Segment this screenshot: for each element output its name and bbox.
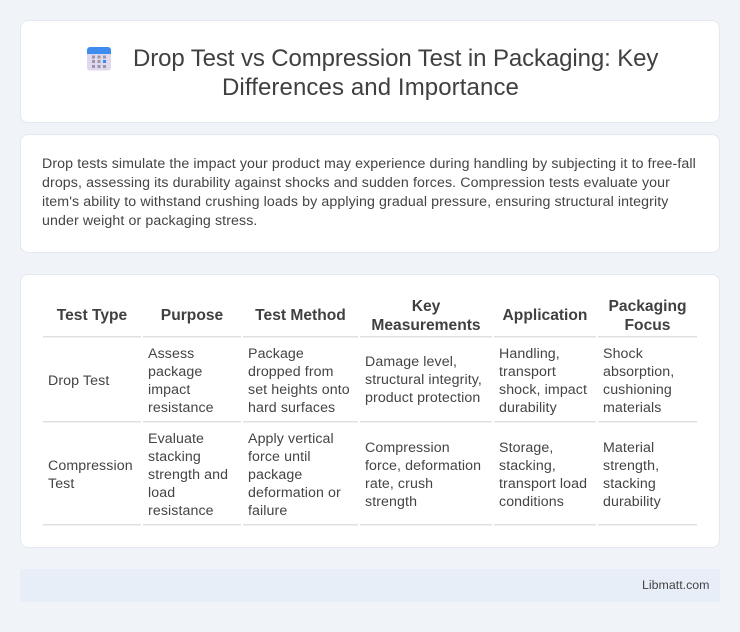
row 2: Compression Test: Compression (48, 458, 133, 474)
row 1: focus: materials (603, 400, 661, 416)
row 2: measurements (365, 440, 481, 510)
title (133, 45, 658, 101)
panel: comparison table card (20, 274, 720, 548)
row 1: measurements: product protection (365, 390, 480, 406)
row 1: purpose: Assess (148, 346, 194, 362)
row 1: method: hard surfaces (248, 400, 335, 416)
header: Test Method: Test Method (255, 307, 346, 324)
row 1: purpose: resistance (148, 400, 214, 416)
header: Key Measurements: Measurements (371, 317, 481, 334)
header: Key Measurements: Key (412, 298, 440, 315)
row 1: application: Handling, (499, 346, 560, 362)
row 2: application: conditions (499, 494, 564, 510)
row 1: purpose: impact (148, 382, 190, 398)
row 1: focus: Shock (603, 346, 643, 362)
row 1: measurements: structural integrity, (365, 372, 482, 388)
title: Drop Test vs Compression Test in Packaging: Key (133, 45, 658, 72)
intro paragraph: Drop tests simulate the impact your product may experience during handling by subjecting it to free-fall (42, 156, 696, 172)
row 2: purpose: load (148, 485, 175, 501)
row 1: method: dropped from (248, 364, 334, 380)
row 2: measurements: rate, crush (365, 476, 433, 492)
header: Packaging Focus: Packaging (608, 298, 686, 315)
row 2: application: stacking, (499, 458, 556, 474)
row 1: method (248, 346, 350, 416)
panel: header card (20, 20, 720, 123)
intro paragraph: drops, assessing its durability against shocks and sudden forces. Compression tests evaluate your (42, 175, 670, 191)
panel: intro paragraph card (20, 134, 720, 253)
row 2: measurements: strength (365, 494, 417, 510)
row 2: Compression Test (48, 458, 133, 492)
row 2: method: Apply vertical (248, 431, 334, 447)
comparison table (43, 298, 697, 526)
row 1: application: transport (499, 364, 556, 380)
row 1: application: shock, impact (499, 382, 587, 398)
row 1: measurements (365, 354, 482, 406)
intro paragraph (42, 156, 696, 229)
row 2: purpose: strength and (148, 467, 228, 483)
row 2: focus: stacking (603, 476, 656, 492)
header: Key Measurements (371, 298, 481, 334)
row 2: Compression Test: Test (48, 476, 74, 492)
row 2: focus: strength, (603, 458, 659, 474)
row 1: Drop Test: Drop Test (48, 373, 109, 389)
row 2: method: force until (248, 449, 311, 465)
row 1: focus: cushioning (603, 382, 672, 398)
icon: calendar (87, 47, 111, 70)
header: Purpose: Purpose (161, 307, 223, 324)
header: Application: Application (503, 307, 587, 324)
row 1: application: durability (499, 400, 557, 416)
intro paragraph: item's ability to withstand crushing loads by applying gradual pressure, ensuring structural integrity (42, 194, 668, 210)
row 1: measurements: Damage level, (365, 354, 457, 370)
row 2: application (499, 440, 587, 510)
row 2: method: deformation or (248, 485, 341, 501)
row 2: application: transport load (499, 476, 587, 492)
row 2: purpose: resistance (148, 503, 214, 519)
row 1: focus (603, 346, 674, 416)
row 2: purpose: stacking (148, 449, 201, 465)
row 1: application (499, 346, 587, 416)
title: Differences and Importance (222, 74, 519, 101)
row 2: measurements: Compression (365, 440, 450, 456)
intro paragraph: under weight or packaging stress. (42, 213, 257, 229)
footer bar (20, 569, 720, 602)
row 2: purpose: Evaluate (148, 431, 204, 447)
row 2: measurements: force, deformation (365, 458, 481, 474)
header: Test Type: Test Type (57, 307, 127, 324)
row 2: method (248, 431, 341, 519)
header: Packaging Focus (608, 298, 686, 334)
row 1: method: set heights onto (248, 382, 350, 398)
row 2: purpose (148, 431, 228, 519)
row 2: application: Storage, (499, 440, 553, 456)
row 1: purpose: package (148, 364, 202, 380)
row 1: purpose (148, 346, 214, 416)
row 1: focus: absorption, (603, 364, 674, 380)
header: Packaging Focus: Focus (625, 317, 670, 334)
row 2: focus: durability (603, 494, 661, 510)
row 2: method: package (248, 467, 302, 483)
row 1: method: Package (248, 346, 304, 362)
row 2: method: failure (248, 503, 287, 519)
footer credit: Libmatt.com (642, 578, 709, 592)
row 2: focus (603, 440, 661, 510)
row 2: focus: Material (603, 440, 654, 456)
